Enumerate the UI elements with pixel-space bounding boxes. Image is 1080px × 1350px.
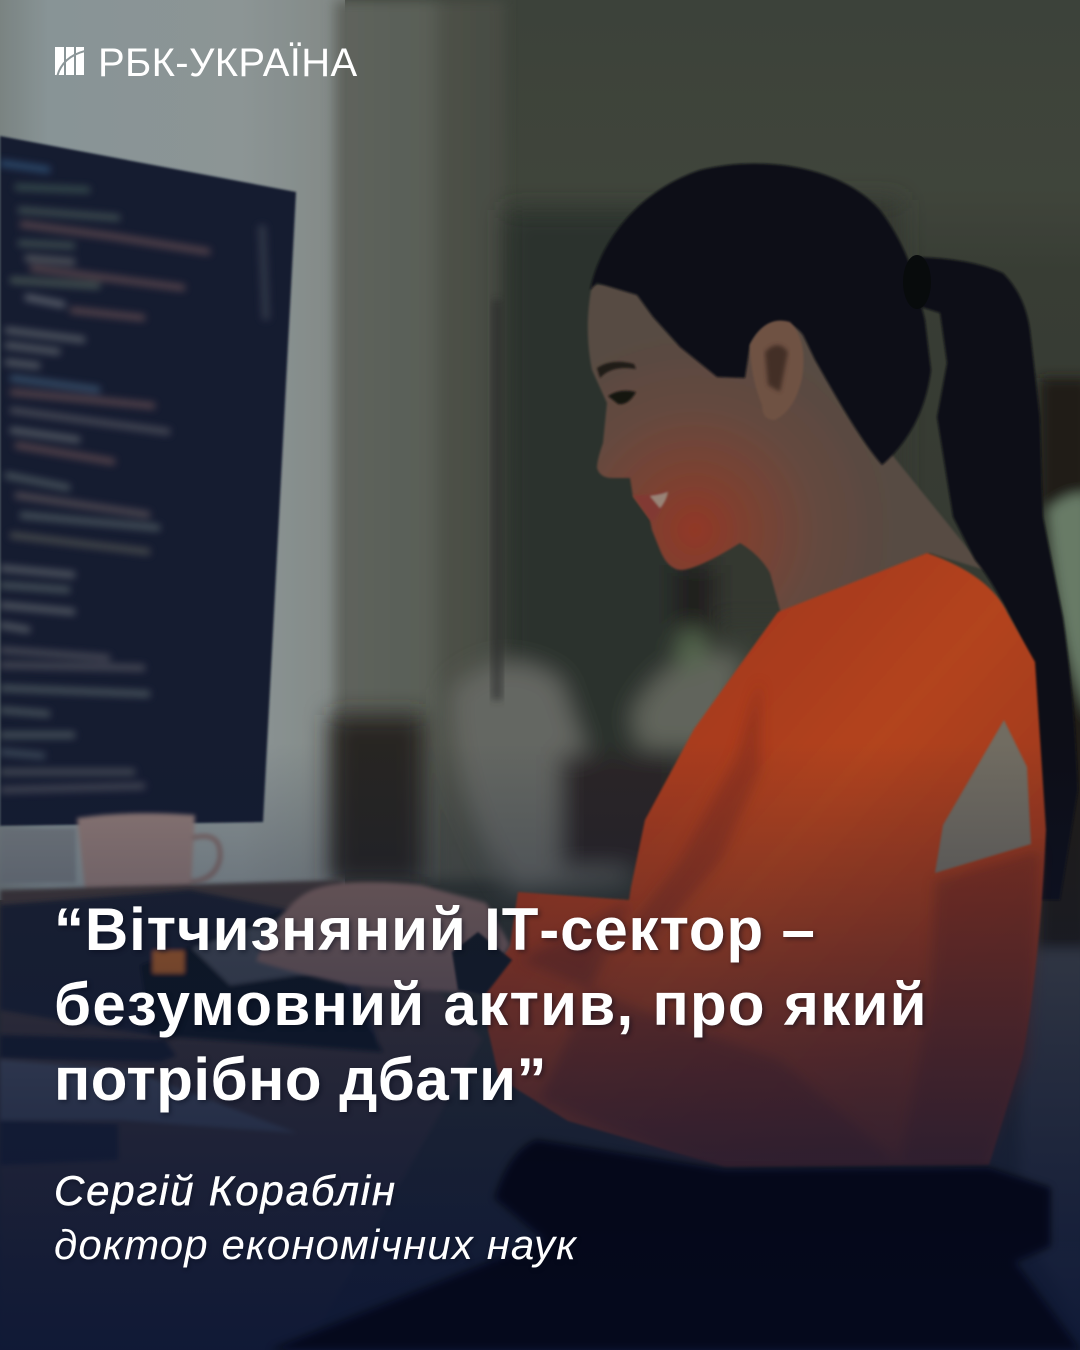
ponytail — [915, 257, 1078, 900]
dark door edge — [491, 300, 503, 700]
desk — [0, 880, 482, 1350]
sleeve cut-out showing background — [935, 720, 1031, 873]
far room blur — [330, 200, 900, 890]
monitor stand and coffee mug — [0, 813, 220, 915]
wall pillar — [335, 0, 505, 880]
blouse — [484, 553, 1046, 1167]
office chair — [270, 1140, 1080, 1350]
wristwatch — [452, 932, 512, 995]
hair — [590, 163, 931, 465]
logo wordmark: РБК-УКРАЇНА — [98, 41, 357, 85]
author name: Сергій Кораблін — [54, 1167, 397, 1214]
facial features — [597, 362, 668, 522]
neck and face — [588, 280, 985, 617]
right side background — [1020, 378, 1080, 1350]
title: quote: “Вітчизняний ІТ-сектор – — [54, 896, 816, 963]
hair tie — [903, 255, 931, 309]
title: quote — [54, 896, 928, 1116]
arm and hand on keyboard — [256, 882, 510, 992]
logo icon — [55, 47, 84, 75]
blurred code lines on screen — [0, 163, 266, 790]
title: quote: потрібно дбати” — [54, 1046, 547, 1113]
title: quote: безумовний актив, про який — [54, 971, 928, 1038]
chair shadow over overlay — [270, 1140, 1080, 1350]
logo: РБК-Україна — [55, 41, 358, 85]
window and curtain — [0, 0, 345, 900]
keyboard and desk items — [0, 890, 383, 1165]
blouse folds and shading — [520, 680, 1040, 1165]
ear — [750, 321, 804, 420]
author role: доктор економічних наук — [54, 1221, 577, 1268]
computer monitor — [0, 136, 296, 826]
